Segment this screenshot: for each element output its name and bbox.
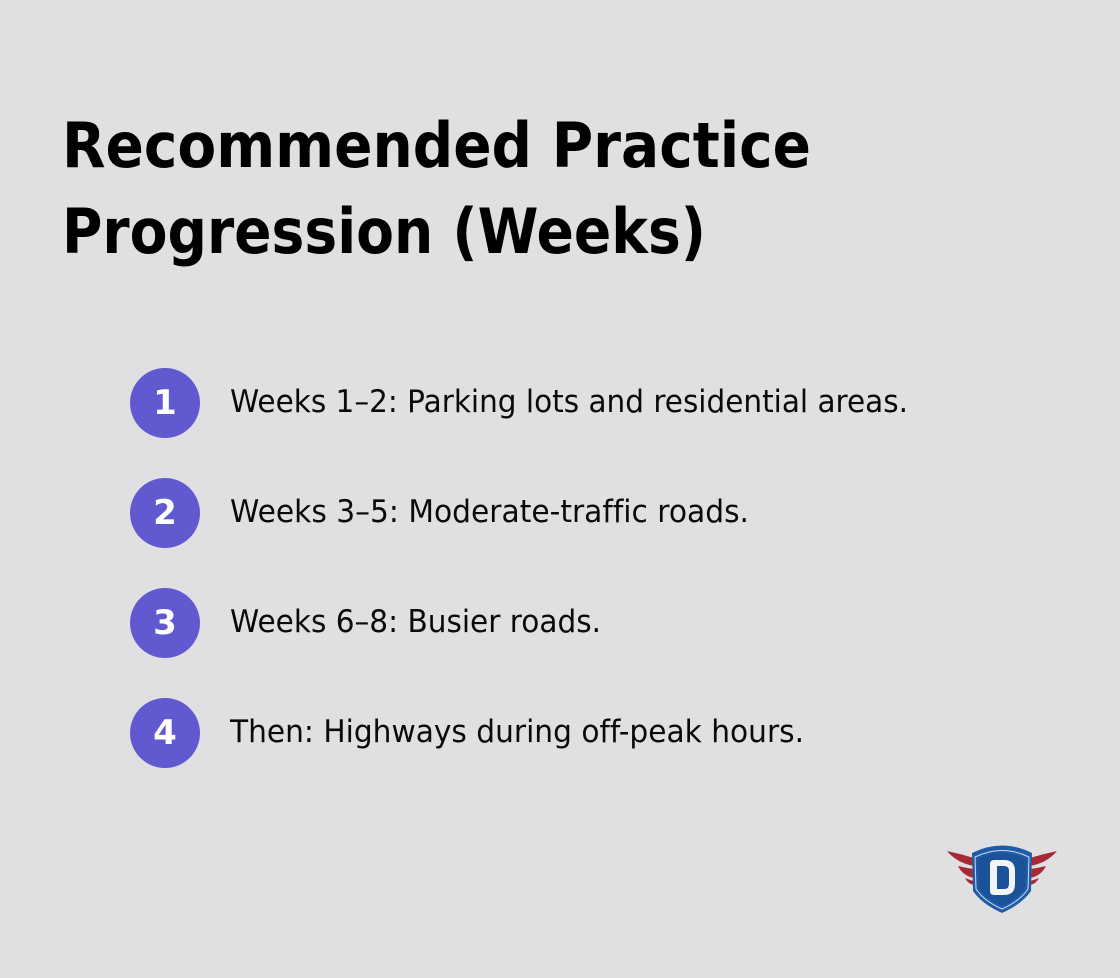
step 4 number badge: 4 (153, 713, 177, 753)
step 2 number badge: 2 (153, 493, 177, 533)
step 3 number badge: 3 (153, 603, 177, 643)
step 1 text: Weeks 1–2: Parking lots and residential areas. (230, 384, 908, 420)
step 3 number badge (130, 588, 200, 658)
step 2 (130, 478, 749, 548)
step 4 number badge (130, 698, 200, 768)
icon: winged shield logo (947, 846, 1057, 913)
step 4 (130, 698, 804, 768)
step 3 (130, 588, 601, 658)
title (62, 109, 811, 268)
step 3 text: Weeks 6–8: Busier roads. (230, 604, 601, 640)
title: Recommended Practice (62, 109, 811, 182)
step 2 text: Weeks 3–5: Moderate-traffic roads. (230, 494, 749, 530)
step 1 number badge (130, 368, 200, 438)
step 1 number badge: 1 (153, 383, 177, 423)
step 2 number badge (130, 478, 200, 548)
step 1 (130, 368, 908, 438)
step 4 text: Then: Highways during off-peak hours. (229, 714, 804, 750)
title: Progression (Weeks) (62, 195, 706, 268)
